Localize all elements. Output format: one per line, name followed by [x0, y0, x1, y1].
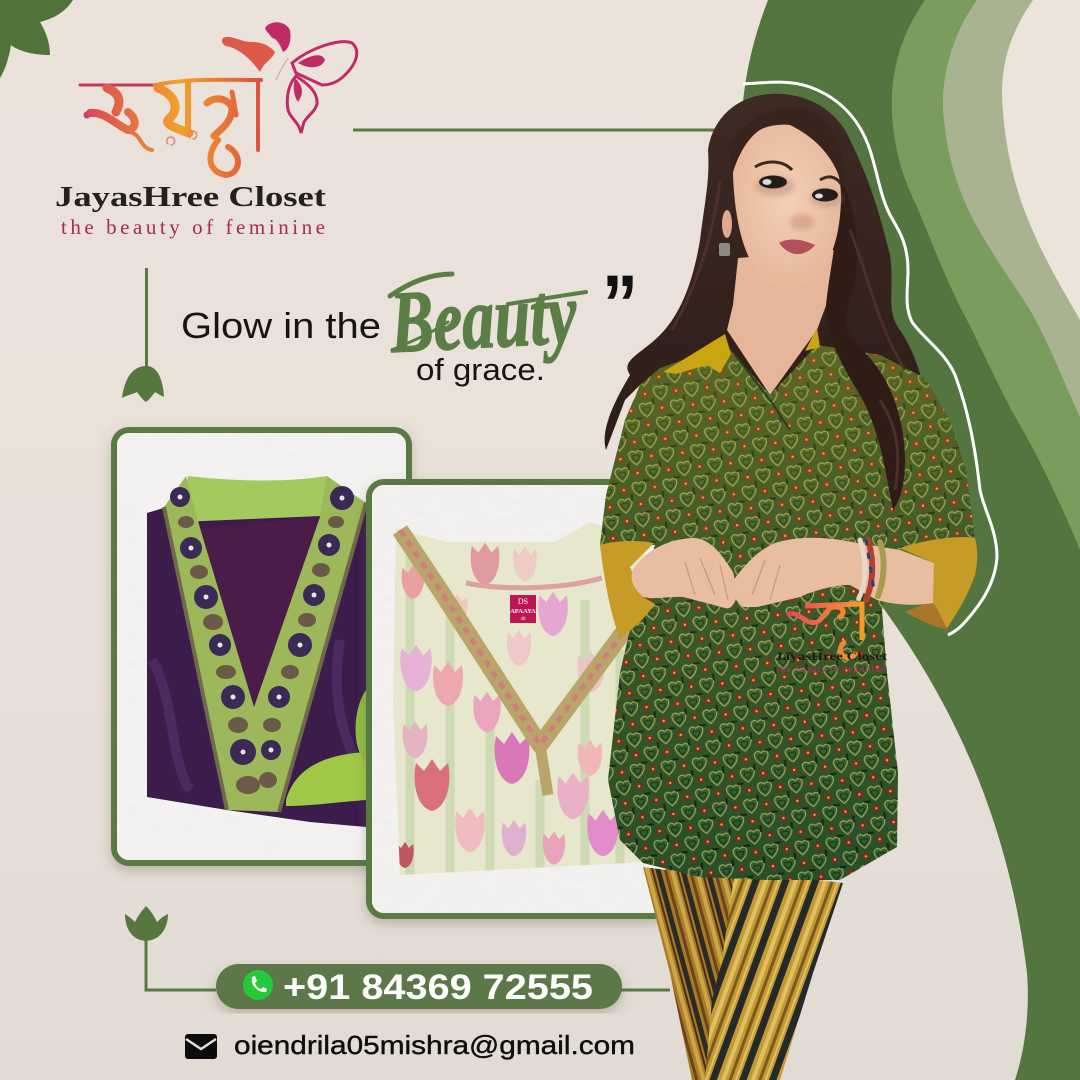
logo mark: calligraphy — [80, 80, 261, 175]
quotation mark: ” — [602, 259, 638, 350]
icon: envelope — [185, 1034, 217, 1059]
phone number: +91 84369 72555 — [283, 968, 593, 1007]
eyebrows — [755, 162, 841, 184]
brand tag: 40 — [520, 617, 526, 622]
lips — [779, 239, 815, 254]
watermark logo on kurti: JayasHree Closet — [775, 649, 887, 663]
nose — [790, 214, 814, 230]
product photo: floral kurti — [369, 482, 669, 916]
logo mark: butterfly fairy — [222, 22, 357, 133]
model figure — [600, 94, 977, 1080]
ear — [722, 210, 732, 238]
hair highlights — [672, 180, 905, 490]
striped trousers — [643, 867, 843, 1080]
face — [719, 108, 844, 289]
printed kurti — [600, 345, 975, 880]
headline line one: Glow in the — [181, 305, 381, 346]
brand tag: DS — [518, 597, 528, 606]
bead bracelets — [858, 540, 884, 600]
earring — [719, 243, 730, 256]
email row — [185, 1030, 635, 1060]
right green wave bands — [741, 0, 1080, 1080]
phone pill — [216, 964, 622, 1009]
brand tagline: the beauty of feminine — [61, 215, 325, 239]
tulips — [396, 540, 620, 880]
lotus ornament with connector — [125, 906, 216, 990]
neckline embroidery — [400, 530, 625, 745]
sleeve cuffs — [600, 537, 977, 638]
hands and forearms — [632, 538, 934, 608]
icon: whatsapp phone — [243, 970, 273, 1000]
hair front strands — [826, 170, 905, 510]
brand tag: APAAYA — [510, 608, 536, 615]
white outline curve — [743, 82, 997, 635]
eyes — [759, 176, 787, 188]
brand name: JayasHree Closet — [55, 181, 326, 213]
brand tag — [510, 595, 536, 623]
yellow collar — [663, 328, 820, 374]
corner leaves — [0, 0, 73, 78]
watermark logo on kurti — [775, 604, 887, 674]
phone pill connector — [620, 988, 670, 992]
headline script word: Beauty — [387, 265, 579, 372]
product photo: purple kurti — [114, 430, 409, 863]
watermark logo on kurti: the beauty of feminine — [777, 664, 885, 674]
tulip bud ornament with stem — [122, 268, 164, 402]
brand logo — [55, 22, 357, 239]
neck — [727, 250, 835, 395]
eye shadow — [755, 176, 795, 196]
email address: oiendrila05mishra@gmail.com — [234, 1030, 635, 1060]
headline — [181, 259, 638, 387]
headline line two: of grace. — [416, 352, 545, 387]
hair back — [605, 94, 926, 510]
connector from logo — [353, 128, 723, 132]
